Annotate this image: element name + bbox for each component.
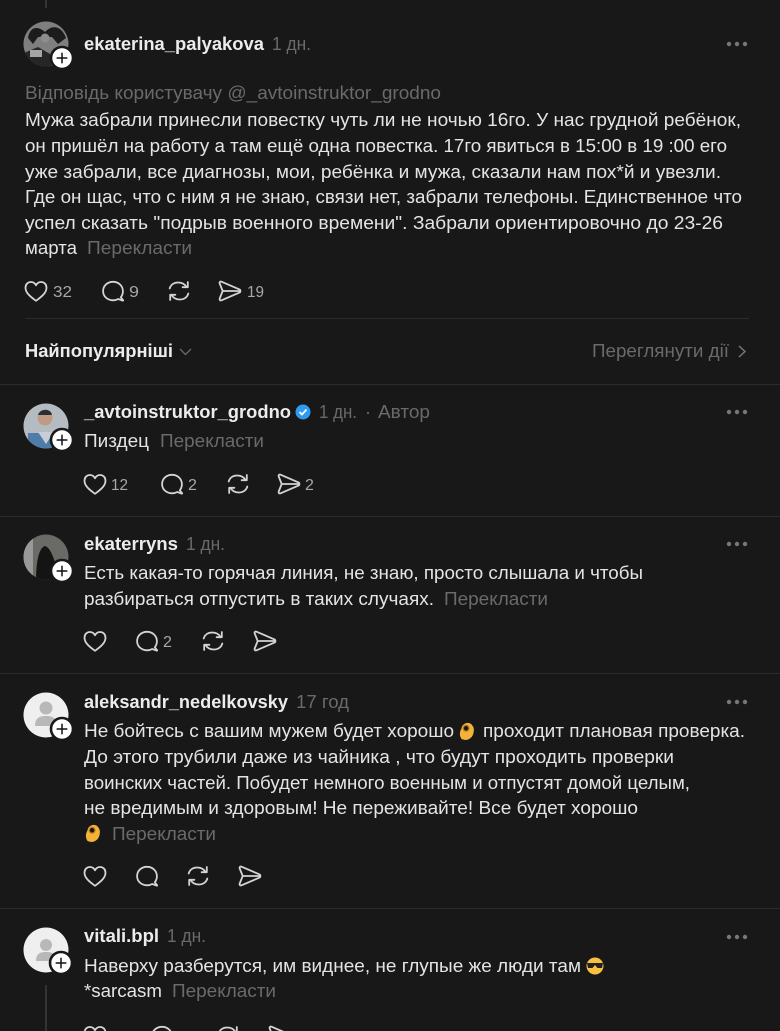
actions row: 12 xyxy=(111,477,128,494)
more menu xyxy=(727,42,747,46)
timestamp: 1 дн. xyxy=(186,534,225,554)
comment text xyxy=(84,721,745,844)
timestamp and author tag: · xyxy=(365,402,371,422)
icon: sunglasses emoji xyxy=(586,958,604,974)
icon: chevron down xyxy=(180,349,191,354)
actions row xyxy=(84,632,275,651)
thread connector xyxy=(45,985,47,1031)
comment: aleksandr_nedelkovsky xyxy=(23,692,747,886)
comment text: Перекласти xyxy=(112,824,216,844)
actions row: 9 xyxy=(129,284,139,301)
comment text xyxy=(84,563,643,609)
comment text: Есть какая-то горячая линия, не знаю, просто слышала и чтобы xyxy=(84,563,643,583)
comment text xyxy=(84,431,264,451)
avatar: ekaterina_palyakova xyxy=(23,21,73,69)
more menu xyxy=(727,410,747,414)
post body: Мужа забрали принесли повестку чуть ли не ночью 16го. У нас грудной ребёнок, xyxy=(25,110,741,130)
timestamp: 17 год xyxy=(296,692,350,712)
timestamp and author tag xyxy=(319,402,430,422)
sort bar xyxy=(25,341,745,361)
comment text: Пиздец xyxy=(84,431,149,451)
comment text: Перекласти xyxy=(160,431,264,451)
comment text xyxy=(84,956,604,1001)
comment text: не вредимым и здоровым! Не переживайте! Все будет хорошо xyxy=(84,798,638,818)
username: _avtoinstruktor_grodno xyxy=(83,402,291,422)
actions row xyxy=(26,282,264,301)
comment: _avtoinstruktor_grodno xyxy=(23,402,747,494)
comment text: До этого трубили даже из чайника , что будут проходить проверки xyxy=(84,747,674,767)
timestamp: 1 дн. xyxy=(167,926,206,946)
username: ekaterryns xyxy=(84,534,178,554)
timestamp and author tag: 1 дн. xyxy=(319,402,357,422)
actions row xyxy=(84,867,260,886)
actions row: 19 xyxy=(247,284,264,301)
comment text: воинских частей. Побудет немного военным и отпустят домой целым, xyxy=(84,773,690,793)
comment text: Перекласти xyxy=(172,981,276,1001)
comment text: Не бойтесь с вашим мужем будет хорошо xyxy=(84,721,454,741)
thread connector top xyxy=(45,0,47,8)
actions row: 2 xyxy=(188,477,197,494)
avatar xyxy=(23,927,72,974)
timestamp and author tag: Автор xyxy=(378,402,430,422)
actions row: 2 xyxy=(163,634,172,651)
post body: успел сказать "подрыв военного времени". Забрали ориентировочно до 23-26 xyxy=(25,213,723,233)
actions row: 2 xyxy=(305,477,314,494)
post body: Где он щас, что с ним я не знаю, связи нет, забрали телефоны. Единственное что xyxy=(25,187,742,207)
sort label: Найпопулярніші xyxy=(25,341,173,361)
comment text: Перекласти xyxy=(444,589,548,609)
comment text: проходит плановая проверка. xyxy=(483,721,745,741)
view activity link: Переглянути дії xyxy=(592,341,729,361)
main post xyxy=(23,21,747,301)
post body: марта xyxy=(25,238,78,258)
comment text: Наверху разберутся, им виднее, не глупые же люди там xyxy=(84,956,581,976)
actions row (cut off) xyxy=(84,1027,290,1031)
username: vitali.bpl xyxy=(84,926,159,946)
icon: chevron right xyxy=(739,346,745,357)
post body xyxy=(25,110,742,258)
avatar xyxy=(23,534,73,582)
timestamp: 1 дн. xyxy=(272,34,311,54)
username: aleksandr_nedelkovsky xyxy=(84,692,288,712)
more menu xyxy=(727,935,747,939)
more menu xyxy=(727,700,747,704)
comment: vitali.bpl xyxy=(23,926,747,1031)
comment: ekaterryns xyxy=(23,534,747,651)
actions row: 32 xyxy=(53,284,72,301)
avatar xyxy=(23,403,73,451)
more menu xyxy=(727,542,747,546)
comment text: *sarcasm xyxy=(84,981,162,1001)
username: ekaterina_palyakova xyxy=(84,34,265,54)
post body: уже забрали, все диагнозы, мои, ребёнка и мужа, сказали нам пох*й и увезли. xyxy=(25,162,721,182)
icon: verified badge xyxy=(296,404,310,420)
comment text: разбираться отпустить в таких случаях. xyxy=(84,589,434,609)
post body: Перекласти xyxy=(87,238,192,258)
reply context: Відповідь користувачу @_avtoinstruktor_grodno xyxy=(25,83,441,104)
avatar xyxy=(23,692,73,740)
actions row xyxy=(84,475,314,494)
post body: он пришёл на работу а там ещё одна повестка. 17го явиться в 15:00 в 19 :00 его xyxy=(25,136,727,156)
